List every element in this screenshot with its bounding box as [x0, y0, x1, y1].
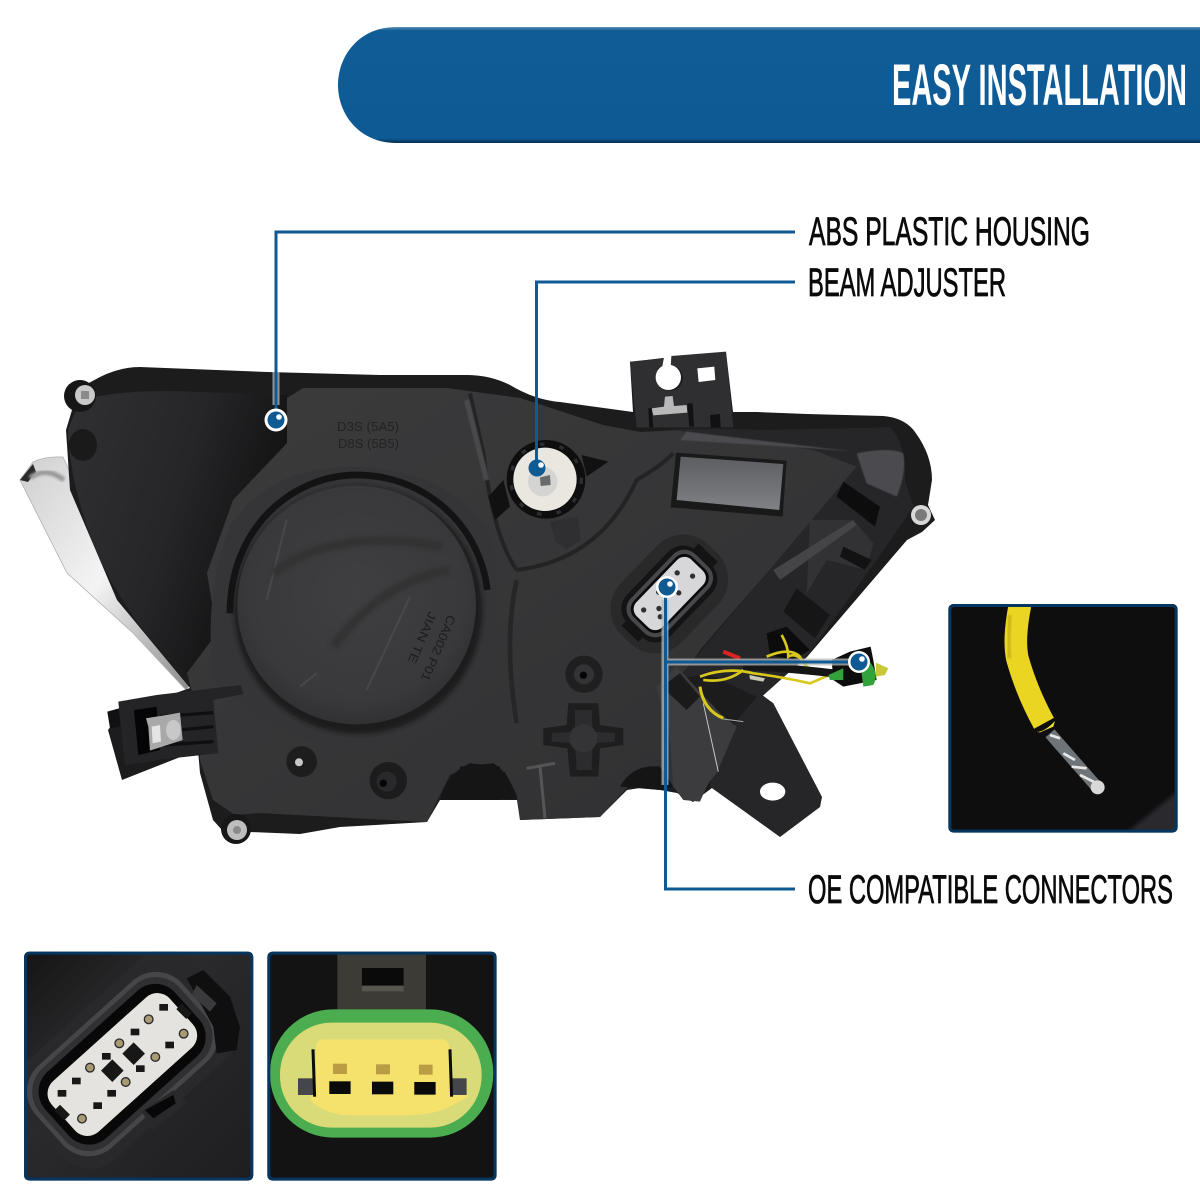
main rear plate [187, 388, 858, 822]
top mounting bracket [630, 352, 733, 427]
connector pins [54, 1003, 192, 1120]
moulded bulb text: D3S (5A5) [337, 419, 399, 434]
headlamp cap with seal ring [211, 467, 498, 750]
lower diagonal fin [657, 667, 737, 802]
moulded bulb text: D8S (5B5) [338, 436, 399, 451]
callout: abs plastic housing [264, 210, 1090, 432]
header banner [338, 27, 1200, 143]
screw: bottom [221, 814, 251, 844]
metal clip [652, 396, 687, 415]
cap moulded text: JIAN TE [405, 609, 439, 666]
screw: top left [64, 380, 96, 412]
side clips [298, 1078, 467, 1095]
moulded T mark [527, 763, 555, 818]
wiring harness and green connector [700, 635, 888, 722]
recessed left housing panel [68, 391, 287, 673]
leader halo where lines cross the photo [276, 372, 850, 785]
14 pin connector on housing [595, 519, 743, 668]
inset photo: stripped yellow wire [948, 604, 1178, 833]
beam adjuster knob [488, 440, 608, 549]
pin sockets [333, 1064, 433, 1075]
inset photo: 3 pin green and yellow connector [267, 952, 497, 1181]
inset photo: 14 pin connector close-up [24, 952, 254, 1181]
lens edge peeking out on the left [20, 457, 190, 690]
cap moulded text: CA002 P01 [418, 613, 458, 684]
label window [671, 453, 787, 517]
label text: BEAM ADJUSTER [808, 261, 1006, 305]
screw: right [911, 505, 931, 525]
cap moulded text [405, 609, 458, 684]
square cut-out [697, 367, 715, 382]
moulded bulb text [337, 419, 399, 451]
callout: oe compatible connectors [656, 576, 1173, 912]
left clip bracket with metal nut [107, 685, 243, 765]
lower right mounting bracket [710, 693, 822, 837]
right side ribbed housing section [673, 427, 913, 698]
lower centre arch notches [440, 763, 500, 800]
callout: beam adjuster [528, 261, 1006, 476]
studs [286, 746, 407, 799]
connector latch [337, 953, 426, 1010]
outer housing silhouette [66, 352, 935, 837]
screws [64, 380, 931, 844]
headlight rear view photo illustration [20, 352, 935, 844]
plate moulding [467, 393, 673, 777]
